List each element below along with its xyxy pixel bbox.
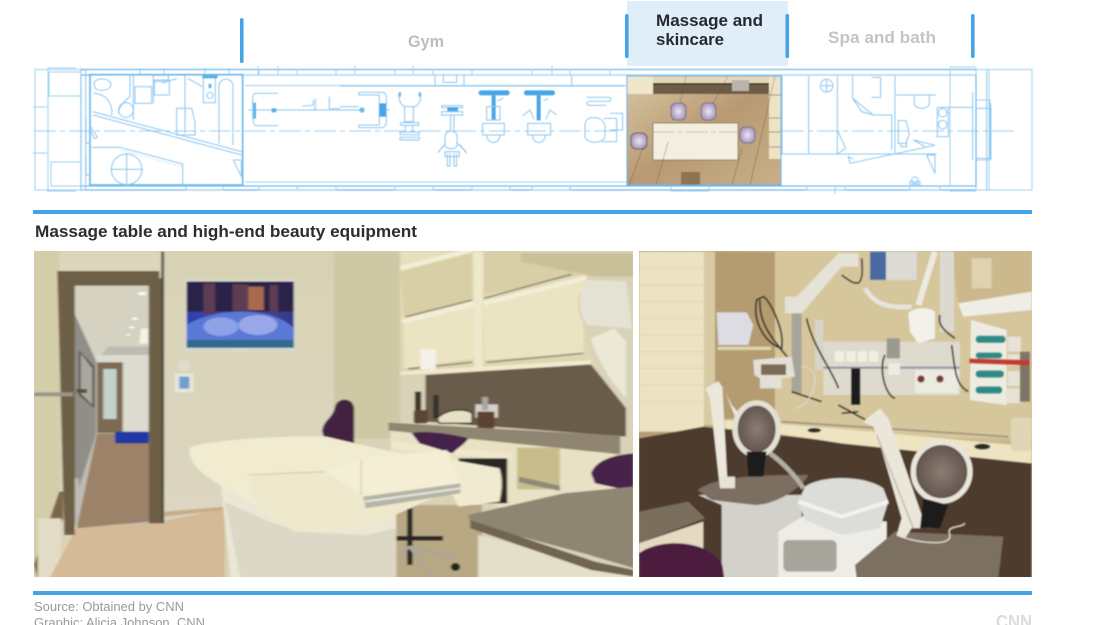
- wall rail: [823, 342, 960, 395]
- section dividers: [240, 14, 975, 63]
- lower dark panel: [639, 427, 1032, 578]
- floor: [49, 508, 225, 578]
- photo: beauty equipment: [635, 245, 1035, 585]
- counter: [388, 423, 620, 454]
- arm: [535, 252, 633, 374]
- chair base: [395, 508, 457, 576]
- source credits: [34, 599, 205, 625]
- monitor device: [753, 357, 795, 388]
- tab label: Spa and bath: Spa and bath: [828, 28, 936, 47]
- bottom rule: [33, 591, 1032, 595]
- tab label: Gym: Gym: [408, 32, 444, 51]
- cables: [756, 258, 968, 425]
- floor plan: spa and bath: [782, 70, 991, 190]
- active tab: Massage and skincare: [627, 1, 788, 66]
- active tab: Massage and skincare: Massage and: [656, 11, 763, 30]
- active tab: Massage and skincare: skincare: [656, 30, 724, 49]
- foreground counter: [476, 534, 633, 577]
- shelf: [718, 347, 771, 350]
- massage table: [221, 485, 396, 578]
- backsplash: [425, 364, 626, 437]
- floor plan: gym equipment: [248, 75, 625, 166]
- stools: [322, 400, 354, 445]
- door frame: [57, 271, 159, 535]
- product boxes: [970, 320, 1007, 405]
- left ledge: [639, 502, 705, 543]
- shelving: [400, 252, 586, 370]
- TV: [184, 279, 295, 351]
- floor plan: outer hull: [33, 66, 1032, 194]
- corridor: [74, 346, 150, 525]
- icons: exercise machines: [340, 75, 625, 166]
- wall controls: [175, 373, 194, 393]
- main wall: [164, 432, 320, 514]
- arm top: [785, 253, 858, 313]
- floor plan: massage room image: [627, 76, 781, 185]
- center boxes: [778, 515, 887, 578]
- right table: [855, 532, 1003, 578]
- subheading: Massage table and high-end beauty equipment: [35, 222, 417, 241]
- counter: [725, 420, 1032, 463]
- right magnifier lamp: [863, 408, 933, 538]
- icon: bench machine left: [248, 93, 353, 126]
- floor plan: [33, 66, 1032, 194]
- source credits: Source: Obtained by CNN: [34, 599, 184, 614]
- floor plan: front bathroom: [81, 70, 243, 190]
- cabinet left: [698, 495, 802, 578]
- photo: massage table room: [30, 245, 653, 592]
- purple stool: [639, 543, 724, 578]
- top rule: [33, 210, 1032, 214]
- left wall: [34, 251, 59, 577]
- left magnifier lamp: [705, 380, 738, 487]
- blind: [639, 252, 704, 432]
